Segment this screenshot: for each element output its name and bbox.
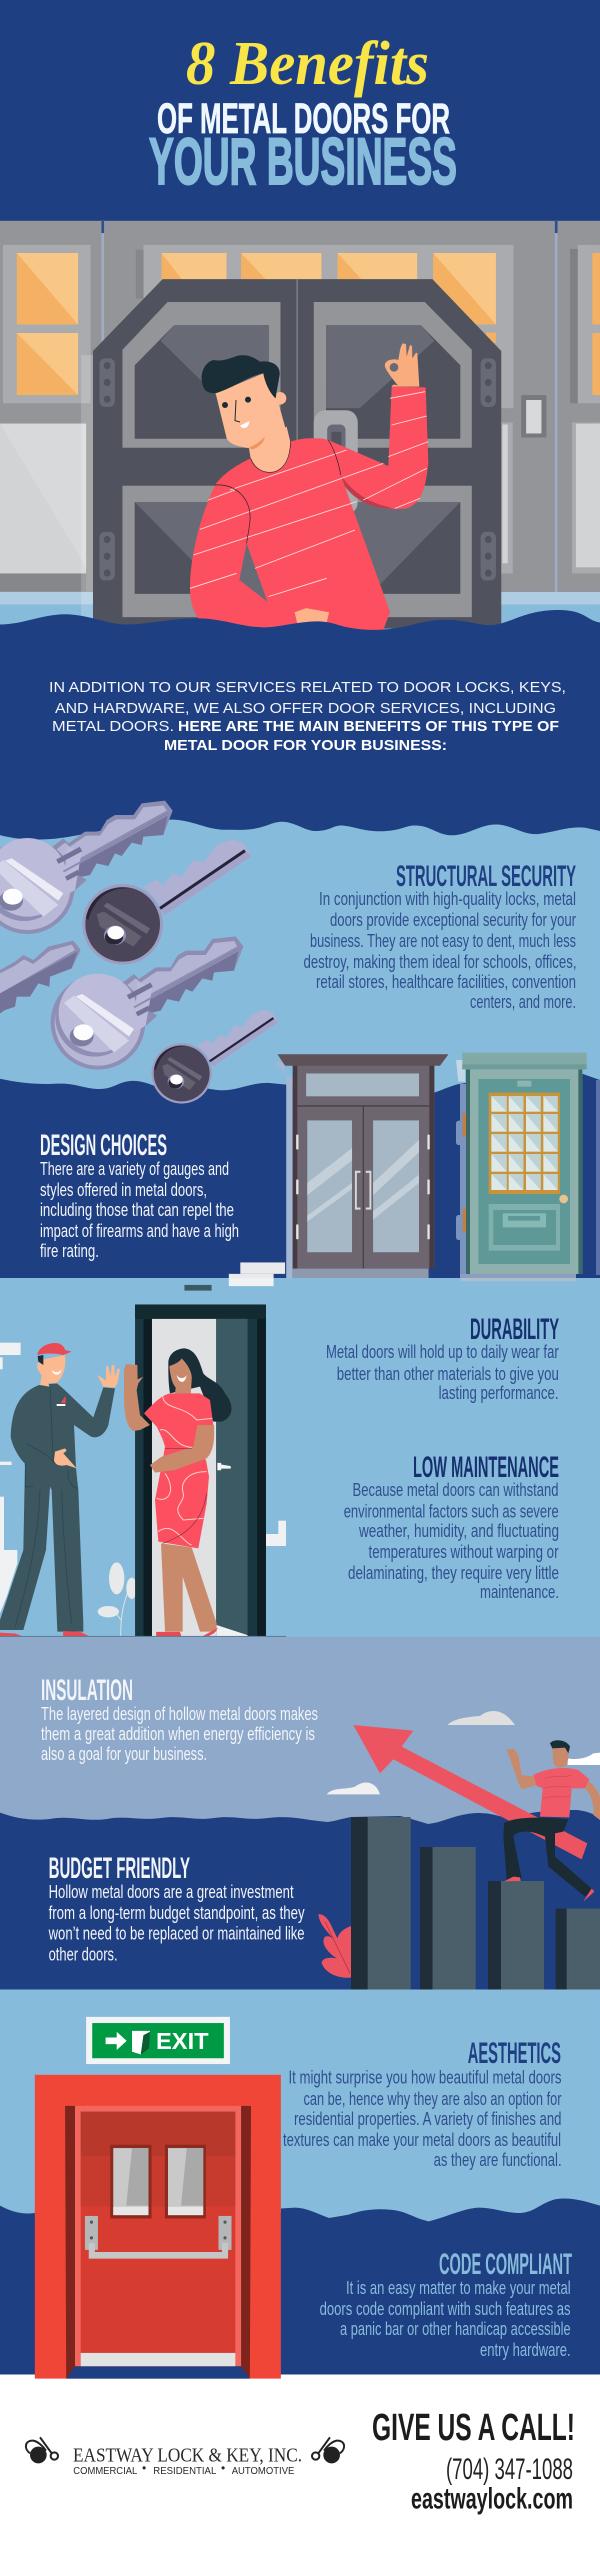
body text bbox=[326, 1342, 559, 1403]
heading: BUDGET FRIENDLY bbox=[49, 1852, 190, 1885]
body text: There are a variety of gauges and bbox=[40, 1159, 229, 1179]
panel: durability bbox=[326, 1313, 559, 1403]
icon: padlock and key left bbox=[26, 2437, 58, 2463]
body text: also a goal for your business. bbox=[41, 1744, 207, 1764]
panel: budget friendly bbox=[48, 1852, 305, 1965]
steps bbox=[229, 1262, 285, 1280]
clouds bbox=[327, 1711, 600, 1794]
body text: them a great addition when energy efficiency is bbox=[41, 1724, 315, 1744]
body text: maintenance. bbox=[480, 1582, 559, 1602]
icon: red arrow bbox=[353, 1725, 587, 1859]
body text: lasting performance. bbox=[439, 1383, 559, 1403]
company services: • bbox=[142, 2461, 146, 2475]
climbing person bbox=[503, 1740, 600, 1902]
call to action bbox=[372, 2407, 575, 2516]
company services: AUTOMOTIVE bbox=[232, 2466, 295, 2477]
icon: exit sign bbox=[86, 2017, 230, 2064]
panel: aesthetics background with wave bbox=[0, 1990, 600, 2221]
panel: structural security bbox=[304, 860, 576, 1012]
body text: The layered design of hollow metal doors makes bbox=[41, 1704, 318, 1724]
heading: INSULATION bbox=[41, 1674, 133, 1707]
exit door illustration bbox=[35, 2017, 281, 2379]
doorway scene with technician and customer bbox=[0, 1278, 576, 1642]
shoes and floor line bbox=[0, 1628, 286, 1642]
company services: COMMERCIAL bbox=[73, 2466, 138, 2477]
body text bbox=[41, 1704, 318, 1764]
intro text block: IN ADDITION TO OUR SERVICES RELATED TO DOOR LOCKS, KEYS, bbox=[49, 679, 566, 696]
man in red sweater giving OK sign bbox=[190, 343, 428, 630]
company logo bbox=[26, 2437, 344, 2477]
panel: durability and maintenance background bbox=[0, 1278, 600, 1637]
body text: Hollow metal doors are a great investment bbox=[49, 1882, 294, 1902]
footer background bbox=[0, 2374, 600, 2569]
panel: low maintenance bbox=[344, 1451, 559, 1602]
doorway bbox=[135, 1304, 266, 1637]
door frame bbox=[35, 2075, 281, 2379]
body text: fire rating. bbox=[40, 1241, 99, 1261]
icon: double glass door bbox=[274, 1054, 448, 1280]
company services: RESIDENTIAL bbox=[153, 2466, 217, 2477]
background blocks bbox=[0, 1343, 286, 1613]
panel: aesthetics bbox=[283, 2037, 562, 2170]
customer in red dress bbox=[124, 1348, 231, 1632]
intro text block: METAL DOOR FOR YOUR BUSINESS: bbox=[164, 737, 447, 754]
intro text block: HERE ARE THE MAIN BENEFITS OF THIS TYPE OF bbox=[178, 718, 559, 735]
body text bbox=[304, 889, 576, 1012]
panel: insulation background with wave bbox=[0, 1637, 600, 1824]
icon: light key middle bbox=[51, 936, 243, 1070]
body text: from a long-term budget standpoint, as they bbox=[49, 1903, 305, 1923]
panel: design choices: DESIGN CHOICES bbox=[40, 1129, 167, 1162]
doors illustration bbox=[229, 1053, 600, 1280]
body text bbox=[320, 2278, 571, 2360]
panel: structural security background wave bbox=[0, 820, 600, 1097]
body text bbox=[40, 1159, 239, 1261]
keys illustration bbox=[0, 801, 278, 1104]
icon: dark key top bbox=[82, 839, 252, 965]
metal double door bbox=[93, 279, 501, 629]
company services bbox=[73, 2461, 295, 2477]
icon: red leaf bbox=[318, 1914, 351, 1978]
forearm and wave under hero bbox=[0, 608, 600, 640]
icon: dark key bottom bbox=[151, 1010, 278, 1104]
top blocks bbox=[184, 1278, 576, 1291]
company name: EASTWAY LOCK & KEY, INC. bbox=[73, 2445, 302, 2467]
growth illustration with arrow, towers and climber bbox=[318, 1711, 600, 1990]
wave divider under hero bbox=[0, 610, 600, 640]
intro text block: AND HARDWARE, WE ALSO OFFER DOOR SERVICES, INCLUDING bbox=[55, 700, 556, 717]
intro text block bbox=[49, 679, 566, 754]
icon: light key top bbox=[0, 801, 173, 934]
light switch bbox=[521, 395, 546, 438]
towers bbox=[351, 1817, 600, 1990]
exit sign label: EXIT bbox=[156, 2028, 209, 2054]
icon: teal door with window bbox=[456, 1053, 600, 1278]
body text bbox=[344, 1480, 559, 1602]
icon: plant bbox=[98, 1562, 137, 1637]
body text: including those that can repel the bbox=[40, 1200, 234, 1220]
body text: impact of firearms and have a high bbox=[40, 1221, 239, 1241]
technician in uniform bbox=[0, 1343, 120, 1632]
icon: padlock and key right bbox=[312, 2437, 344, 2463]
title line: 8 Benefits: 8 Benefits bbox=[186, 30, 429, 98]
body text: styles offered in metal doors, bbox=[40, 1180, 207, 1200]
panel: design choices bbox=[40, 1129, 239, 1261]
title bbox=[149, 30, 457, 198]
company services: • bbox=[221, 2461, 225, 2475]
intro text block: METAL DOORS. bbox=[52, 718, 174, 735]
icon: light key cut off at left bbox=[0, 941, 81, 1013]
panel: code compliant bbox=[320, 2248, 572, 2360]
body text bbox=[48, 1882, 305, 1965]
body text bbox=[283, 2068, 562, 2170]
body text: other doors. bbox=[49, 1945, 118, 1965]
body text: won’t need to be replaced or maintained like bbox=[48, 1924, 305, 1944]
panel: hero storefront scene bbox=[0, 221, 600, 640]
panel: insulation bbox=[41, 1674, 318, 1764]
